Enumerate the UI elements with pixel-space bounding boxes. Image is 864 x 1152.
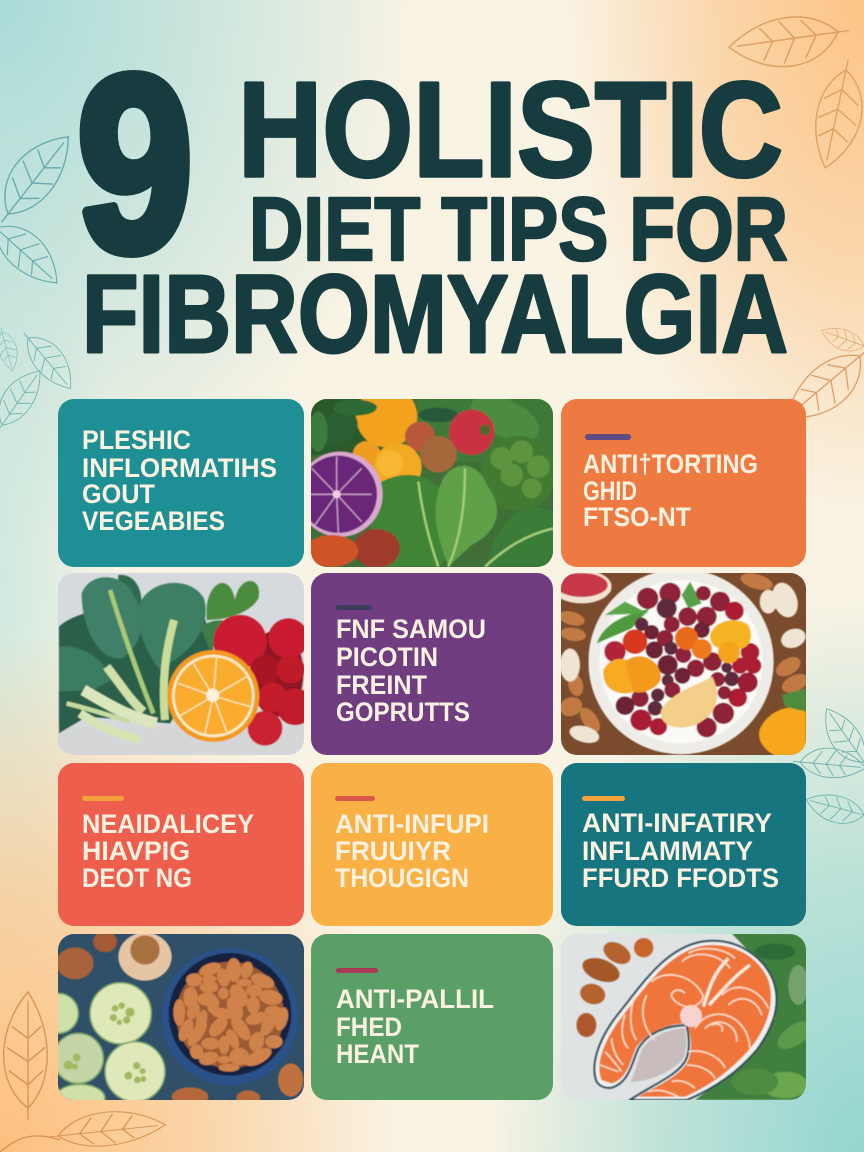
panel: card 7 red — [58, 763, 304, 926]
decoration: bottom-left leaves — [0, 992, 167, 1152]
accent bar — [82, 796, 124, 801]
title numeral 9: 9 — [77, 24, 193, 303]
panel: card 5 purple — [311, 573, 553, 755]
decoration: left leaves — [0, 322, 83, 438]
card 7 text: NEAIDALICEY — [82, 809, 254, 839]
card 7 text: DEOT NG — [82, 863, 192, 893]
accent bar — [582, 796, 625, 801]
card 1 text: VEGEABIES — [82, 506, 225, 536]
accent bar — [335, 796, 375, 801]
panel: photo of fruit bowl and nuts — [552, 569, 811, 756]
panel: card 1 teal — [58, 399, 304, 567]
card 11 text: HEANT — [336, 1039, 419, 1069]
card 1 text: INFLORMATIHS — [82, 453, 277, 483]
card 5 text: FNF SAMOU — [336, 614, 486, 644]
panel: card 8 yellow — [311, 763, 553, 926]
accent bar — [585, 434, 631, 440]
decoration: top-right leaves — [726, 9, 864, 173]
panel: card 9 dark teal — [561, 763, 806, 926]
card 9 text: FFURD FFODTS — [582, 863, 779, 893]
decoration: right leaves — [775, 322, 864, 435]
accent bar — [336, 968, 378, 973]
accent bar — [336, 605, 372, 610]
decoration: top-left leaves — [0, 122, 83, 295]
card 1 text: PLESHIC — [82, 425, 191, 455]
card 3 text: ANTI†TORTING — [583, 449, 758, 479]
panel: photo of almonds and cucumber — [58, 934, 304, 1100]
card 5 text: GOPRUTTS — [336, 697, 470, 727]
panel: photo of greens, orange and tomatoes — [57, 573, 313, 760]
card 9 text: INFLAMMATY — [582, 836, 753, 866]
card 5 text: FREINT — [336, 670, 427, 700]
card 11 text: FHED — [336, 1012, 402, 1042]
panel: card 11 green — [311, 934, 553, 1100]
card 3 text: GHID — [583, 476, 637, 506]
card 3 text — [583, 449, 758, 532]
card 8 text: ANTI-INFUPI — [335, 809, 489, 839]
card 1 text — [82, 425, 277, 536]
card 8 text: FRUUIYR — [335, 836, 451, 866]
decoration: lower right leaves — [792, 701, 864, 831]
card 7 text — [82, 809, 254, 893]
panel: photo of vegetables and fruit — [311, 399, 553, 567]
title line: HOLISTIC: HOLISTIC — [238, 54, 783, 205]
card 1 text: GOUT — [82, 479, 155, 509]
card 5 text — [336, 614, 486, 727]
panel: photo of salmon steak and almonds — [561, 933, 817, 1100]
card 7 text: HIAVPIG — [82, 836, 190, 866]
card 9 text — [582, 808, 779, 893]
card 8 text: THOUGIGN — [335, 863, 469, 893]
card 8 text — [335, 809, 489, 893]
card 3 text: FTSO-NT — [583, 502, 691, 532]
card 11 text — [336, 984, 494, 1069]
card 5 text: PICOTIN — [336, 642, 438, 672]
title — [77, 24, 788, 376]
panel: card 3 orange — [561, 399, 806, 567]
card 9 text: ANTI-INFATIRY — [582, 808, 772, 838]
card 11 text: ANTI-PALLIL — [336, 984, 494, 1014]
